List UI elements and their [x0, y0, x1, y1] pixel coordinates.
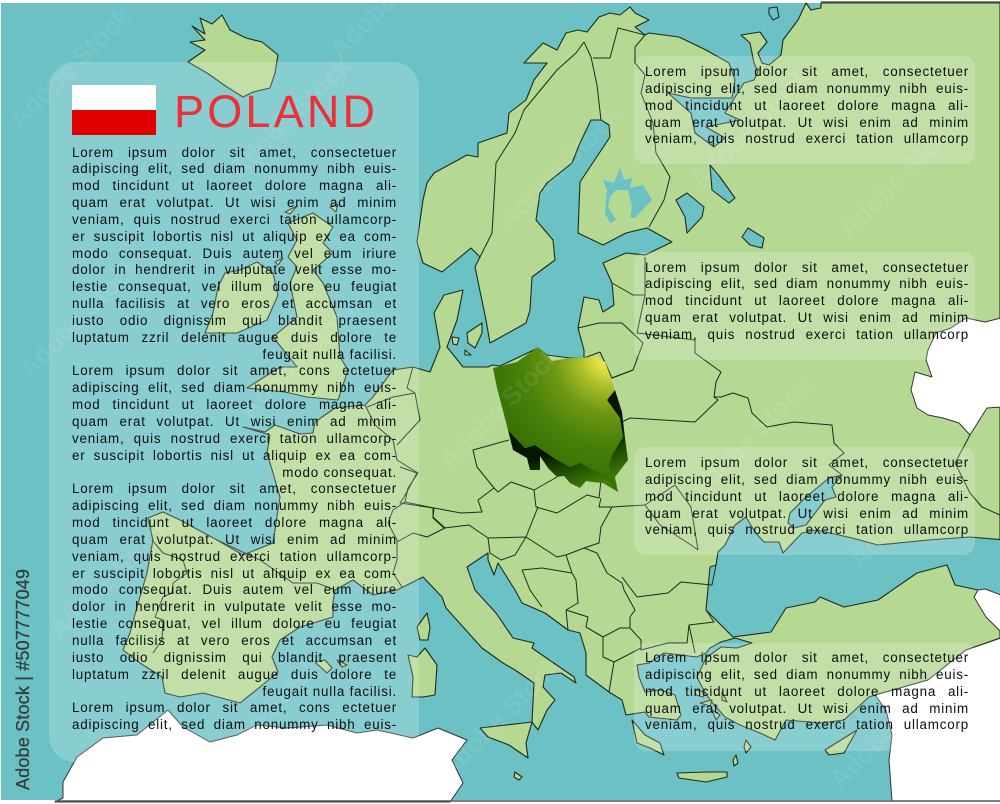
- stock watermarks: Adobe Stock: [433, 340, 567, 474]
- text block: right 4: adipiscing elit, sed diam nonummy nibh euis-: [645, 667, 969, 682]
- text block: left column: nulla facilisis at vero eros et accumsan et: [72, 296, 397, 311]
- text block: right 2: quam erat volutpat. Ut wisi enim ad minim: [645, 310, 969, 325]
- text block: right 4: [645, 650, 969, 732]
- text block: left column: modo consequat. Duis autem vel eum iriure: [72, 246, 397, 261]
- text block: right 4: Lorem ipsum dolor sit amet, consectetuer: [645, 650, 969, 665]
- stock watermarks: Adobe Stock: [493, 100, 627, 234]
- text block: right 3: mod tincidunt ut laoreet dolore magna ali-: [645, 489, 969, 504]
- stock watermarks: Adobe Stock: [193, 650, 327, 784]
- text block: right 1: mod tincidunt ut laoreet dolore magna ali-: [645, 98, 969, 113]
- Poland top face: [493, 347, 623, 492]
- icon: Polish flag: [72, 85, 156, 135]
- panel: left text background: [49, 62, 419, 762]
- text block: right 2: veniam, quis nostrud exerci tation ullamcorp: [645, 327, 969, 342]
- white land: Caucasus east: [974, 589, 1000, 632]
- white land: Kazakhstan: [911, 318, 1000, 435]
- text block: left column: lestie consequat, vel illum dolore eu feugiat: [72, 279, 397, 294]
- Poland extrusion: [508, 390, 628, 492]
- text block: right 3: [645, 455, 969, 537]
- stock watermarks: Adobe Stock: [823, 660, 957, 794]
- island: Crete: [677, 772, 727, 782]
- panel: right background 1: [634, 56, 975, 164]
- text block: left column: dolor in hendrerit in vulputate velit esse mo-: [72, 599, 397, 614]
- text block: right 1: veniam, quis nostrud exerci tation ullamcorp: [645, 131, 969, 146]
- text block: left column: quam erat volutpat. Ut wisi enim ad minim: [72, 195, 397, 210]
- text block: right 1: quam erat volutpat. Ut wisi enim ad minim: [645, 115, 969, 130]
- stock watermarks: Adobe Stock: [843, 440, 977, 574]
- text block: right 3: Lorem ipsum dolor sit amet, consectetuer: [645, 455, 969, 470]
- text block: left column: luptatum zzril delenit augue duis dolore te: [72, 330, 397, 345]
- text block: left column: modo consequat.: [282, 465, 397, 480]
- panel: right background 4: [634, 643, 975, 751]
- text block: right 2: [645, 260, 969, 342]
- stock watermarks: Adobe Stock: [683, 60, 817, 194]
- text block: left column: mod tincidunt ut laoreet dolore magna ali-: [72, 515, 397, 530]
- text block: right 3: veniam, quis nostrud exerci tation ullamcorp: [645, 522, 969, 537]
- text block: left column: quam erat volutpat. Ut wisi enim ad minim: [72, 532, 397, 547]
- text block: right 2: mod tincidunt ut laoreet dolore magna ali-: [645, 293, 969, 308]
- text block: right 2: adipiscing elit, sed diam nonummy nibh euis-: [645, 276, 969, 291]
- text block: left column: er suscipit lobortis nisl ut aliquip ex ea com-: [72, 448, 397, 463]
- island: Sicily: [480, 722, 532, 758]
- text block: left column: er suscipit lobortis nisl ut aliquip ex ea com-: [72, 566, 397, 581]
- small Arctic lake: [769, 7, 779, 20]
- text block: left column: veniam, quis nostrud exerci tation ullamcorp-: [72, 212, 397, 227]
- stock id label: Adobe Stock | #507777049: [13, 569, 33, 790]
- islands: Aegean: [632, 690, 751, 766]
- island: Cyprus: [825, 730, 857, 755]
- text block: left column: nulla facilisis at vero eros et accumsan et: [72, 633, 397, 648]
- text block: left column: veniam, quis nostrud exerci tation ullamcorp-: [72, 549, 397, 564]
- panel: right background 3: [634, 447, 975, 555]
- islands: Balearic: [315, 660, 347, 673]
- text block: left column: adipiscing elit, sed diam nonummy nibh euis-: [72, 380, 397, 395]
- text block: left column: feugait nulla facilisi.: [262, 684, 397, 698]
- island: Iceland: [188, 15, 278, 97]
- islands: Corsica and Sardinia: [408, 613, 437, 697]
- text block: left column: mod tincidunt ut laoreet dolore magna ali-: [72, 397, 397, 412]
- text block: left column: feugait nulla facilisi.: [262, 347, 397, 362]
- stock watermarks: Adobe Stock: [433, 650, 567, 784]
- Black Sea and Azov: [676, 165, 1000, 637]
- text block: left column: adipiscing elit, sed diam nonummy nibh euis-: [72, 161, 397, 176]
- text block: left column: Lorem ipsum dolor sit amet, cons ectetuer: [72, 700, 397, 715]
- text block: right 1: [645, 64, 969, 146]
- title: POLAND: [174, 86, 375, 137]
- text block: right 3: quam erat volutpat. Ut wisi enim ad minim: [645, 506, 969, 521]
- panel: right background 2: [634, 252, 975, 360]
- lakes of Finland: [603, 168, 652, 223]
- text block: right 1: adipiscing elit, sed diam nonummy nibh euis-: [645, 81, 969, 96]
- text block: left column: luptatum zzril delenit augue duis dolore te: [72, 667, 397, 682]
- stock watermarks: Adobe Stock: [43, 510, 177, 644]
- text block: left column: Lorem ipsum dolor sit amet, consectetuer: [72, 481, 397, 496]
- text block: right 4: veniam, quis nostrud exerci tation ullamcorp: [645, 717, 969, 732]
- text block: left column: veniam, quis nostrud exerci tation ullamcorp-: [72, 431, 397, 446]
- text block: left column: Lorem ipsum dolor sit amet, consectetuer: [72, 144, 397, 160]
- islands: Danish: [452, 323, 482, 355]
- island: Malta: [514, 772, 522, 780]
- stock watermarks: Adobe Stock: [233, 290, 367, 424]
- text block: left column: modo consequat. Duis autem vel eum iriure: [72, 582, 397, 597]
- text block: right 3: adipiscing elit, sed diam nonummy nibh euis-: [645, 472, 969, 487]
- stock watermarks: Adobe Stock: [683, 370, 817, 504]
- text block: right 4: mod tincidunt ut laoreet dolore magna ali-: [645, 684, 969, 699]
- white land: Africa: [55, 710, 467, 802]
- text block: left column: iusto odio dignissim qui blandit praesent: [72, 650, 397, 665]
- text block: left column: iusto odio dignissim qui blandit praesent: [72, 313, 397, 328]
- text block: left column: lestie consequat, vel illum dolore eu feugiat: [72, 616, 397, 631]
- text block: left column: er suscipit lobortis nisl ut aliquip ex ea com-: [72, 229, 397, 244]
- text block: left column: adipiscing elit, sed diam nonummy nibh euis-: [72, 498, 397, 513]
- stock watermarks: Adobe Stock: [833, 110, 967, 244]
- stock watermarks: Adobe Stock: [3, 0, 137, 134]
- text block: left column: Lorem ipsum dolor sit amet, cons ectetuer: [72, 363, 397, 378]
- text block: right 1: Lorem ipsum dolor sit amet, consectetuer: [645, 64, 969, 79]
- white land: Middle East: [875, 638, 1000, 801]
- stock watermarks: Adobe Stock: [13, 250, 147, 384]
- small islands: [275, 204, 338, 265]
- lakes: Ladoga, Onega, Peipus: [676, 193, 704, 233]
- text block: right 4: quam erat volutpat. Ut wisi enim ad minim: [645, 701, 969, 716]
- text block: left column: adipiscing elit, sed diam nonummy nibh euis-: [72, 717, 397, 732]
- Poland 3D shape: [493, 347, 628, 492]
- text block: right 2: Lorem ipsum dolor sit amet, consectetuer: [645, 260, 969, 274]
- text block: left column: dolor in hendrerit in vulputate velit esse mo-: [72, 262, 397, 277]
- text block: left column: [72, 144, 397, 732]
- island: Great Britain: [247, 213, 348, 400]
- stock watermarks: Adobe Stock: [223, 50, 357, 184]
- country borders: [152, 28, 1000, 692]
- text block: left column: mod tincidunt ut laoreet dolore magna ali-: [72, 178, 397, 193]
- island: Ireland: [205, 262, 278, 333]
- text block: left column: quam erat volutpat. Ut wisi enim ad minim: [72, 414, 397, 429]
